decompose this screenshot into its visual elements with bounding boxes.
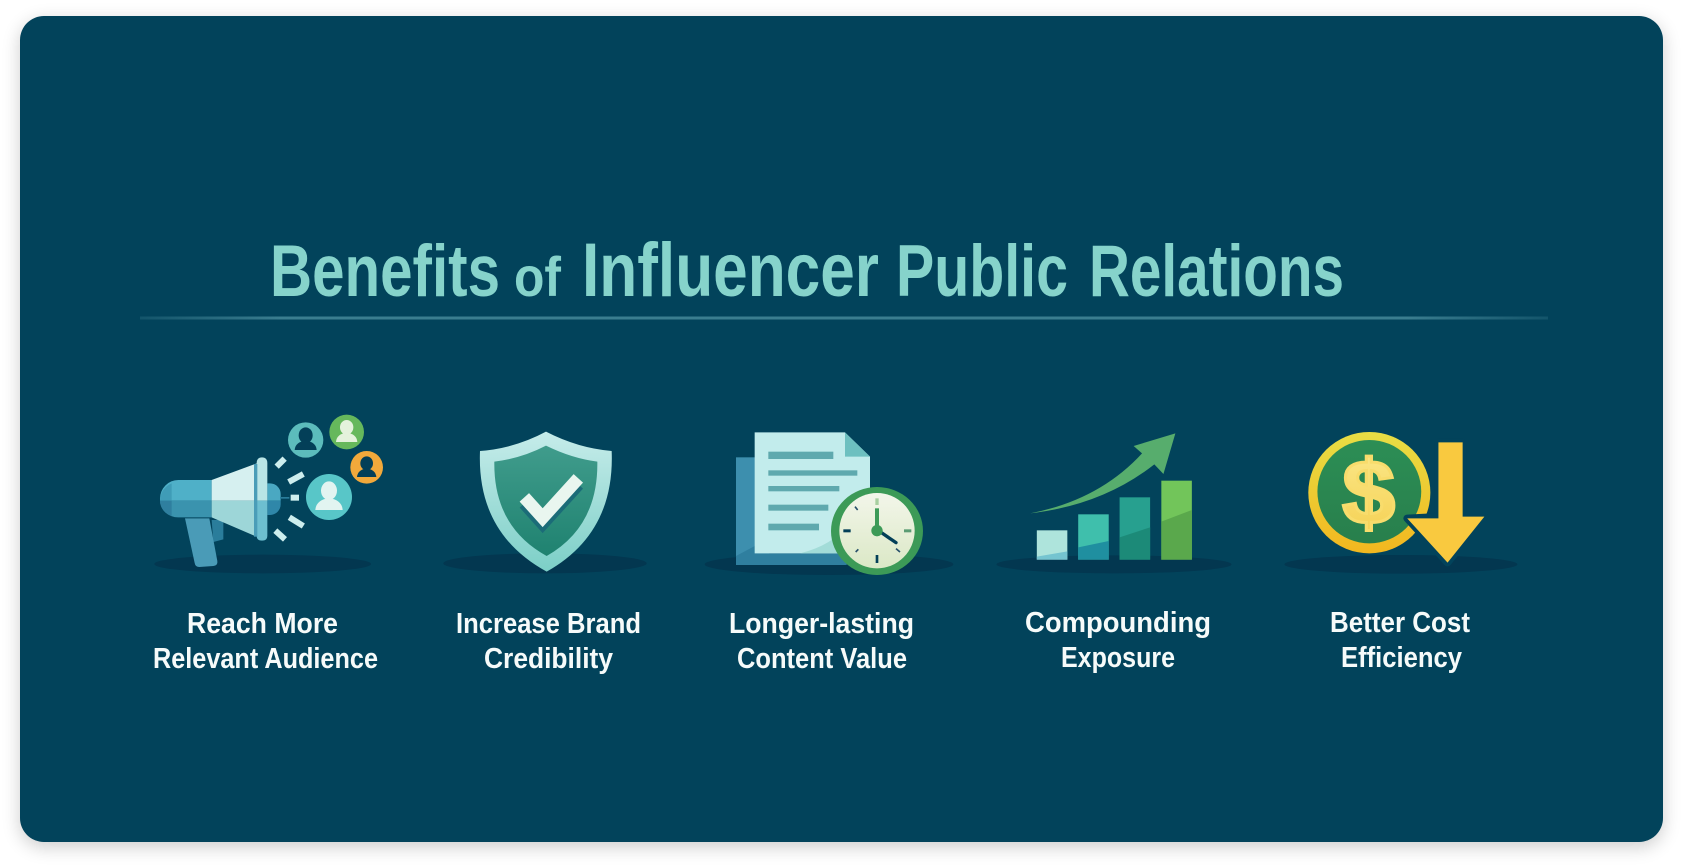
label: increase brand credibility [456,608,641,675]
label: better cost efficiency: Better Cost [1330,607,1470,639]
title: Benefits [270,231,500,312]
label: compounding exposure: Compounding [1025,607,1211,639]
panel: longer-lasting content value [705,432,953,675]
icon: megaphone with audience avatars [154,415,383,573]
label: reach more relevant audience: Relevant Audience [153,643,378,675]
label: reach more relevant audience [153,608,378,675]
panel: better cost efficiency [1284,432,1517,674]
label: increase brand credibility: Increase Brand [456,608,641,640]
title divider line [140,316,1548,320]
label: longer-lasting content value [729,608,914,675]
label: reach more relevant audience: Reach More [187,608,338,640]
panel: compounding exposure [996,433,1231,674]
panel: reach more relevant audience [153,415,383,675]
title [270,228,1344,313]
panel: increase brand credibility [443,432,647,675]
icon: shield with check mark [443,432,647,573]
icon: document with clock [705,432,953,575]
title: Public [896,231,1068,312]
label: increase brand credibility: Credibility [484,643,613,675]
label: longer-lasting content value: Content Value [737,643,907,675]
label: compounding exposure: Exposure [1061,642,1175,674]
label: better cost efficiency [1330,607,1470,674]
label: compounding exposure [1025,607,1211,674]
title: Relations [1089,231,1344,312]
title: Influencer [582,228,879,313]
label: longer-lasting content value: Longer-lasting [729,608,914,640]
label: better cost efficiency: Efficiency [1341,642,1462,674]
icon: dollar coin with down arrow: $ [1342,441,1395,543]
icon: rising bar chart with arrow [996,433,1231,573]
icon: dollar coin with down arrow [1284,432,1517,574]
title: of [514,245,561,308]
